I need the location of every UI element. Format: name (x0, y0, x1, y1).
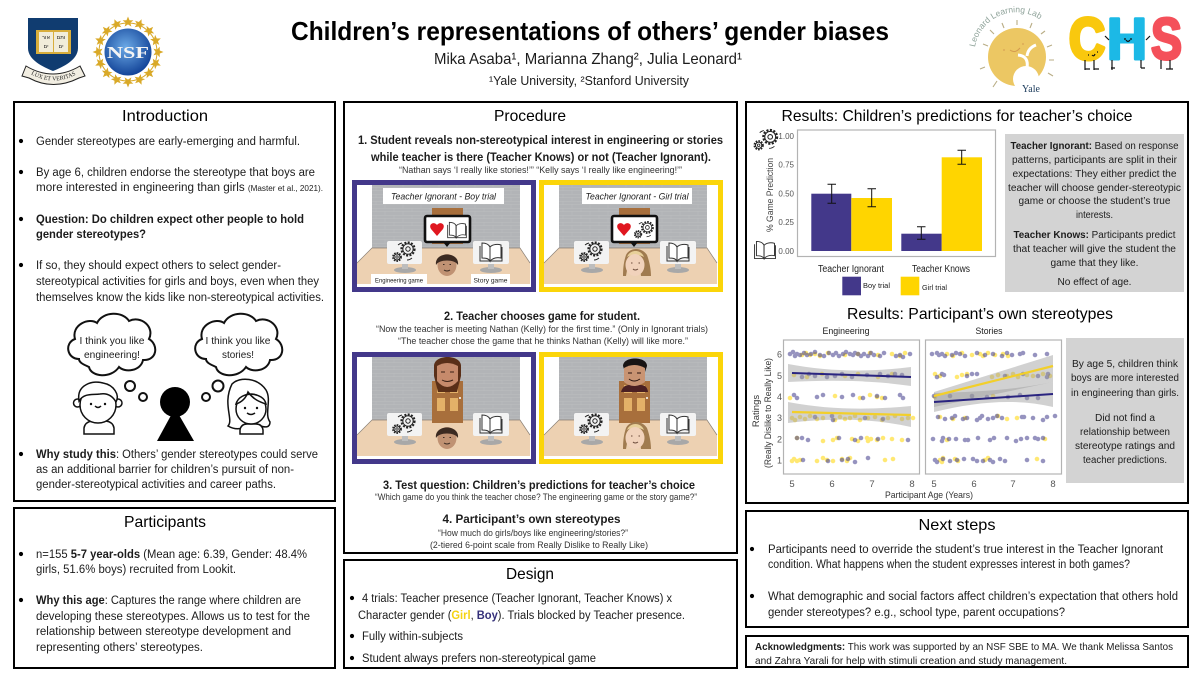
panel: Procedure (344, 102, 737, 553)
panel: Acknowledgments: Acknowledgments: This work was supported by an NSF SBE to MA. We thank Melissa Santos (755, 641, 1173, 653)
icon: gears axis end (754, 130, 777, 150)
scene: Teacher Ignorant girl trial: Teacher Ignorant - Girl trial (586, 192, 689, 202)
engineering tick labels: 5 (789, 479, 795, 490)
step 1 text: “Nathan says ‘I really like stories!’” “Kelly says ‘I really like engineering!’” (399, 165, 682, 175)
header logos: NSF seal: NSF (107, 43, 149, 62)
heading: Introduction: Introduction (122, 108, 208, 125)
thought bubble: stories (195, 314, 282, 401)
text: why this age (19, 595, 310, 654)
engineering tick labels: 6 (777, 350, 782, 360)
legend (842, 277, 947, 295)
callout: teacher prediction summary: interests. (1076, 210, 1113, 221)
callout: teacher prediction summary: game or choose the student’s true (1018, 196, 1171, 207)
ribbon and line: girl trend (788, 402, 911, 427)
icon: girl (228, 379, 270, 434)
step 3 text (375, 480, 697, 502)
points: girl trial (935, 353, 1050, 462)
logo: CHS: H (1107, 7, 1147, 72)
bullet list: introduction text: Question: Do children expect other people to hold (36, 214, 304, 226)
text: why this age: developing these stereotypes. Allows us to test for the (36, 611, 310, 623)
scatter chart: Engineering ratings (777, 326, 920, 490)
affiliations: ¹Yale University, ²Stanford University (489, 73, 689, 88)
y axis labels: 0.50 (778, 190, 795, 198)
text: why study this: Why study this: Others’ gender stereotypes could serve (36, 449, 318, 461)
bullet list: next steps (750, 544, 1178, 619)
y axis labels: 0.00 (778, 247, 795, 256)
text: why study this: gender-stereotypical activities and career paths. (36, 479, 276, 491)
icon: book axis end (755, 241, 775, 259)
step 1 text: while teacher is there (Teacher Knows) or not (Teacher Ignorant). (370, 152, 711, 164)
legend: Girl trial (922, 283, 947, 292)
callout: stereotype summary: By age 5, children think (1072, 359, 1179, 370)
ribbon and line: boy trend (788, 364, 911, 386)
header logos: Yale shield: ותם (57, 35, 65, 41)
header logos: Yale shield (21, 18, 86, 85)
bullet list: introduction text: By age 6, children endorse the stereotype that boys are (36, 167, 315, 179)
logo: CHS: C (1069, 7, 1105, 72)
scene: Teacher Ignorant boy trial: Engineering game (375, 278, 423, 284)
step 4 text: 4. Participant’s own stereotypes (442, 514, 620, 526)
header logos: Yale shield: ים (59, 44, 63, 50)
axis titles: Ratings (751, 395, 762, 427)
bullet list: introduction text (19, 136, 324, 304)
x axis labels: Teacher Ignorant (818, 264, 884, 275)
engineering tick labels: 5 (777, 371, 782, 381)
engineering tick labels: 1 (777, 456, 782, 466)
bullet list: next steps: Participants need to override the student’s true interest in the Teacher Ignorant (768, 544, 1164, 556)
step 4 text (430, 514, 648, 550)
callout: teacher prediction summary: game that they like. (1050, 258, 1138, 269)
bullet list: design: Fully within-subjects (362, 631, 463, 643)
ribbon and line: girl trend (934, 355, 1053, 407)
thought bubble: engineering (68, 314, 155, 401)
bullet list: next steps: What demographic and social factors affect children’s expectation that others hold (768, 591, 1178, 603)
x axis labels: Teacher Knows (912, 264, 970, 275)
points: girl trial (790, 353, 913, 461)
callout: teacher prediction summary: patterns, participants are split in their (1012, 155, 1178, 166)
engineering tick labels: 3 (777, 413, 782, 423)
y axis labels: 1.00 (778, 132, 795, 141)
points: boy trial (932, 353, 1055, 462)
callout: teacher prediction summary: Teacher Knows: Participants predict (1014, 230, 1176, 241)
bullet list: introduction text: If so, they should expect others to select gender- (36, 260, 281, 272)
callout: stereotype summary: stereotype ratings and (1075, 441, 1175, 452)
step 2 text: “The teacher chose the game that he thinks Nathan (Kelly) will like more.” (398, 336, 688, 346)
panel: Participants (14, 508, 335, 668)
engineering tick labels: 6 (829, 479, 835, 490)
logo: Leonard Learning Lab: Yale (1022, 84, 1040, 95)
points: boy trial (790, 352, 910, 462)
stories tick labels: 6 (971, 479, 977, 490)
step 1 text: 1. Student reveals non-stereotypical interest in engineering or stories (358, 135, 723, 147)
callout: teacher prediction summary: that teacher will give the student the (1013, 244, 1176, 255)
engineering tick labels (777, 350, 915, 490)
authors: Mika Asaba¹, Marianna Zhang², Julia Leonard¹ (434, 51, 742, 68)
y axis labels: % Game Prediction (765, 158, 776, 232)
text: why this age: representing others’ stereotypes. (36, 642, 203, 654)
heading: Results own stereotypes: Results: Participant’s own stereotypes (847, 306, 1113, 323)
engineering tick labels: 4 (777, 392, 782, 402)
y axis labels: 0.75 (778, 160, 795, 170)
text: sample: girls, 51.6% boys) recruited from Lookit. (36, 564, 236, 576)
logo: CHS (1069, 7, 1182, 72)
callout: stereotype summary: relationship between (1080, 427, 1170, 438)
step 3 text: 3. Test question: Children’s predictions for teacher’s choice (383, 480, 695, 492)
header logos: Yale shield: ים (44, 44, 48, 50)
stories tick labels: 5 (931, 479, 937, 490)
axis titles: (Really Dislike to Really Like) (763, 358, 774, 468)
stories tick labels: 8 (1050, 479, 1056, 490)
bullet list: next steps: condition. What happens when the student expresses interest in both games? (768, 559, 1130, 571)
step 2 text: 2. Teacher chooses game for student. (444, 311, 640, 323)
bullet list: design: Character gender (Girl, Boy). Trials blocked by Teacher presence. (358, 610, 685, 622)
bullet list: design (350, 593, 685, 665)
callout: stereotype summary: teacher predictions. (1083, 455, 1167, 466)
step 4 text: (2-tiered 6-point scale from Really Dislike to Really Like) (430, 540, 648, 550)
heading: Next steps: Next steps (918, 517, 996, 534)
icon: boy (74, 382, 122, 434)
text: sample: n=155 5-7 year-olds (Mean age: 6.39, Gender: 48.4% (36, 549, 307, 561)
callout: stereotype summary (1066, 338, 1184, 483)
step 3 text: “Which game do you think the teacher chose? The engineering game or the story game?” (375, 492, 697, 502)
text: sample (19, 549, 307, 576)
heading: Results predictions: Results: Children’s predictions for teacher’s choice (782, 108, 1133, 125)
text: why study this (19, 449, 318, 491)
header logos: Yale shield: LUX ET VERITAS (31, 70, 76, 80)
scene: teacher chooses, boy trial (354, 354, 534, 462)
heading: Procedure: Procedure (494, 108, 566, 125)
x axis labels (818, 264, 970, 275)
engineering tick labels: 7 (869, 479, 875, 490)
scene: Teacher Ignorant boy trial: Story game (474, 278, 508, 284)
callout: teacher prediction summary (1005, 134, 1184, 292)
bullet list: introduction text: stereotypical activities for girls and boys, even when they (36, 276, 319, 288)
step 2 text: “Now the teacher is meeting Nathan (Kelly) for the first time.” (Only in Ignorant trials) (376, 324, 708, 334)
bullet list: next steps: gender stereotypes? e.g., school type, parent occupations? (768, 607, 1065, 619)
error bars (828, 150, 966, 239)
scene: Teacher Ignorant boy trial (354, 182, 534, 290)
logo: Leonard Learning Lab: Leonard Learning Lab (969, 6, 1042, 46)
callout: teacher prediction summary: Teacher Ignorant: Based on response (1010, 141, 1179, 152)
y axis labels (765, 132, 795, 256)
panel: Next steps (746, 511, 1188, 627)
callout: stereotype summary: Did not find a (1095, 413, 1155, 424)
stories tick labels: 7 (1010, 479, 1016, 490)
logo: CHS: S (1151, 7, 1182, 72)
illustration: children thinking about stereotypes (68, 314, 282, 441)
thought bubble: stories: stories! (222, 349, 254, 361)
thought bubble: engineering: I think you like (80, 335, 145, 347)
legend: Boy trial (863, 281, 890, 290)
bar chart: game prediction (754, 130, 996, 295)
panel: Design (344, 560, 737, 668)
callout: teacher prediction summary: expectations: They either predict the (1012, 169, 1177, 180)
scene: teacher chooses, girl trial (542, 354, 720, 462)
icon: teacher keyhole silhouette (157, 387, 194, 441)
ribbon and line: boy trend (934, 382, 1053, 412)
scene: Teacher Ignorant girl trial (542, 182, 720, 290)
text: why this age: relationship between stereotype development and (36, 626, 291, 638)
title: Children’s representations of others’ gender biases (291, 16, 889, 46)
bullet list: introduction text: more interested in engineering than girls (Master et al., 2021). (36, 182, 323, 194)
callout: stereotype summary: in engineering than girls. (1071, 388, 1179, 399)
panel: Results (746, 102, 1188, 503)
engineering tick labels: 8 (909, 479, 915, 490)
callout: stereotype summary: boys are more interested (1071, 373, 1179, 384)
stories tick labels (931, 479, 1056, 490)
bullet list: design: Student always prefers non-stereotypical game (362, 653, 596, 665)
engineering tick labels: 2 (777, 434, 782, 444)
callout: teacher prediction summary: teacher will choose gender-stereotypic (1008, 183, 1181, 194)
text: why this age: Why this age: Captures the range where children are (36, 595, 301, 607)
bullet list: introduction text: gender stereotypes? (36, 229, 146, 241)
y axis labels: 0.25 (778, 218, 795, 227)
heading: Participants: Participants (124, 514, 206, 531)
logo: Leonard Learning Lab (969, 6, 1054, 95)
bullet list: introduction text: themselves know the kids like non-stereotypical activities. (36, 292, 324, 304)
thought bubble: stories: I think you like (206, 335, 271, 347)
scatter chart: Stories ratings (926, 326, 1062, 490)
axis titles: Participant Age (Years) (885, 490, 973, 501)
callout: teacher prediction summary: No effect of age. (1058, 277, 1132, 288)
scene: Teacher Ignorant boy trial: Teacher Ignorant - Boy trial (391, 192, 497, 202)
panel: Introduction (14, 102, 335, 501)
step 2 text (376, 311, 708, 346)
step 1 text (358, 135, 723, 175)
scatter chart: Engineering ratings: Engineering (822, 326, 870, 337)
bullet list: introduction text: Gender stereotypes are early-emerging and harmful. (36, 136, 300, 148)
axis titles (751, 358, 973, 501)
thought bubble: engineering: engineering! (84, 349, 140, 361)
bars (811, 157, 982, 251)
panel: Acknowledgments (746, 636, 1188, 667)
panel: Acknowledgments: and Zahra Yarali for help with stimuli creation and study management. (755, 655, 1067, 667)
scatter chart: Stories ratings: Stories (976, 326, 1003, 337)
header logos: NSF seal (92, 16, 164, 88)
step 4 text: “How much do girls/boys like engineering/stories?” (438, 528, 628, 538)
bullet list: design: 4 trials: Teacher presence (Teacher Ignorant, Teacher Knows) x (362, 593, 672, 605)
header logos: Yale shield: אור (42, 35, 50, 41)
heading: Design: Design (506, 566, 554, 583)
text: why study this: as an additional barrier for children’s pursuit of non- (36, 464, 294, 476)
